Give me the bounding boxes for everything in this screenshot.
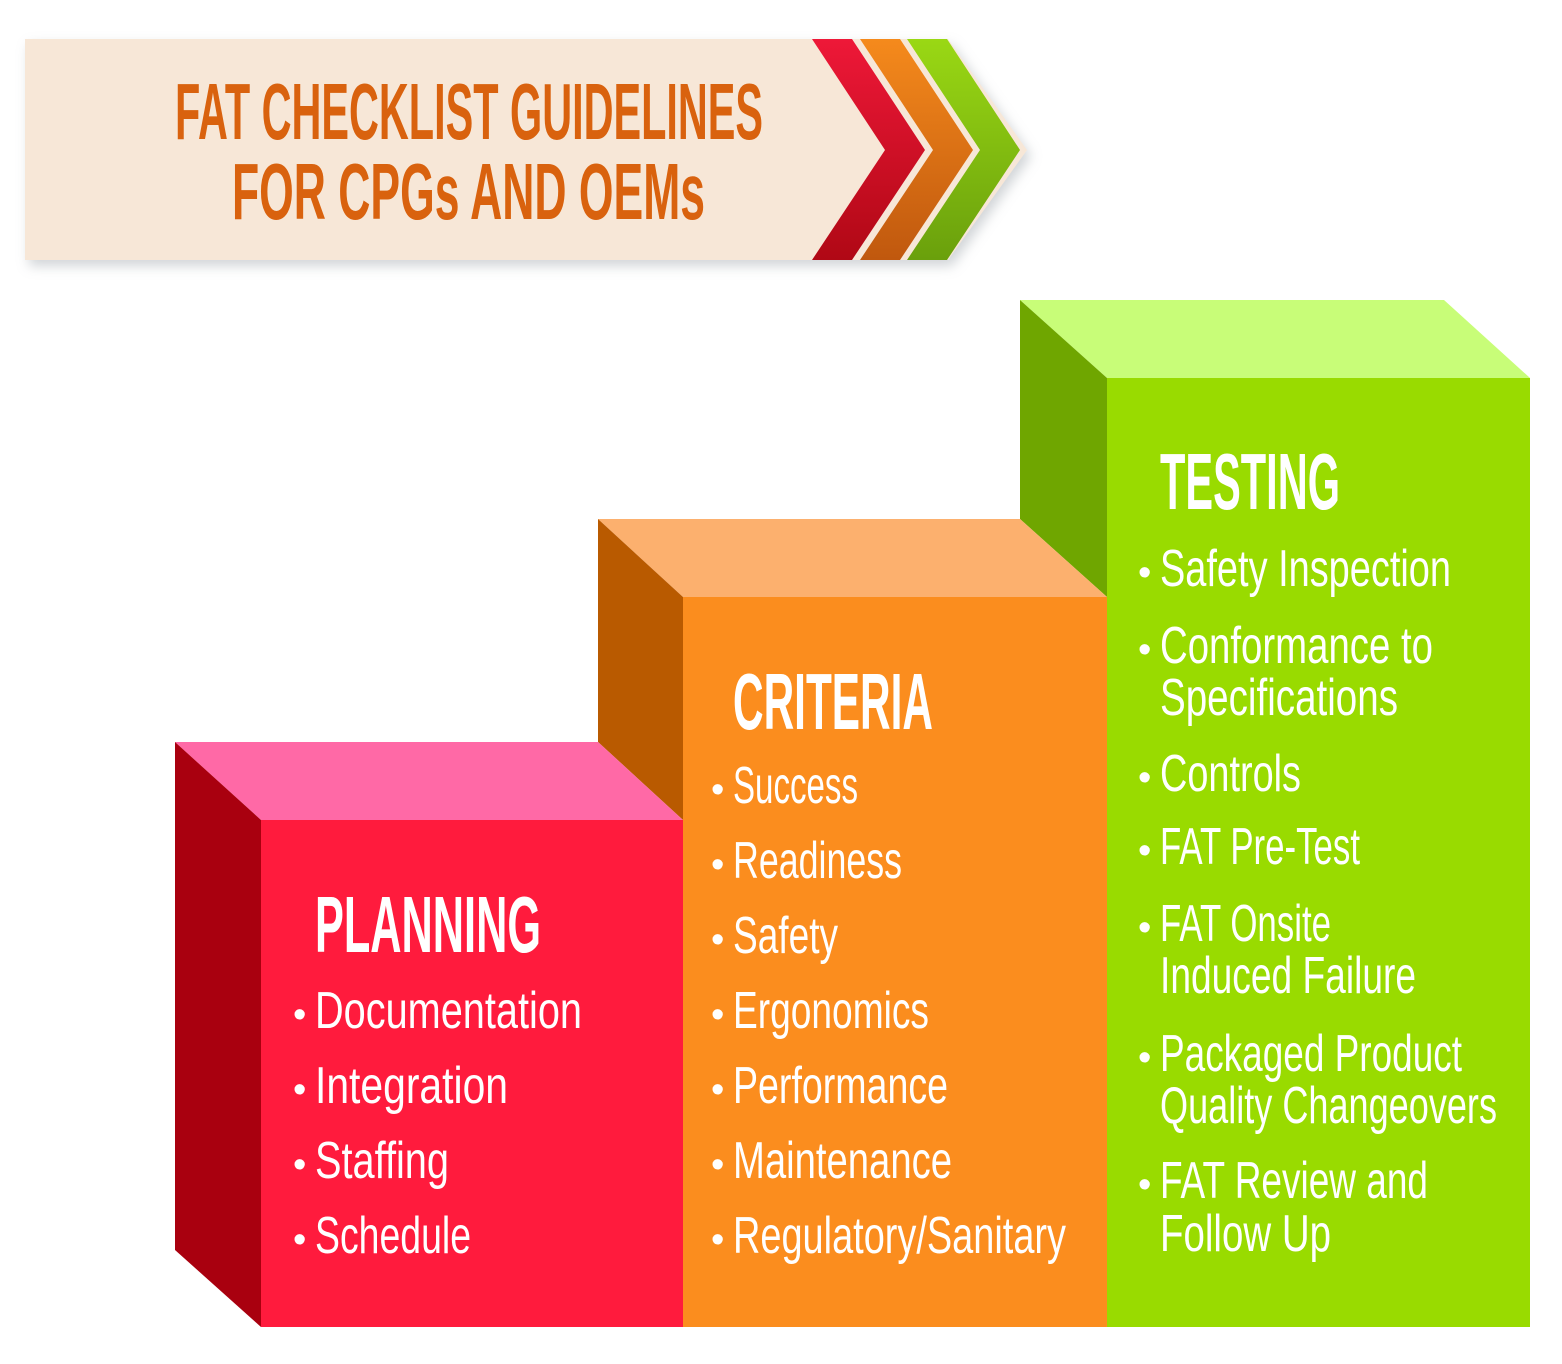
testing text: Controls (1160, 745, 1301, 803)
planning text: • (293, 1219, 306, 1261)
criteria text: Performance (733, 1057, 948, 1115)
criteria text: • (711, 1219, 724, 1261)
testing text: Safety Inspection (1160, 540, 1451, 598)
criteria text: CRITERIA (733, 657, 933, 746)
title text (175, 67, 763, 236)
block: testing (1020, 300, 1530, 1327)
criteria text: Success (733, 757, 858, 815)
title banner (25, 39, 1027, 260)
planning text: • (293, 1069, 306, 1111)
testing text: FAT Review and (1160, 1152, 1428, 1210)
block: criteria (598, 519, 1107, 1327)
testing text: • (1138, 1164, 1151, 1206)
planning text: Documentation (315, 982, 582, 1040)
testing text: • (1138, 629, 1151, 671)
testing text: Follow Up (1160, 1205, 1331, 1263)
planning text: Schedule (315, 1207, 471, 1265)
title text: FOR CPGs AND OEMs (232, 147, 705, 236)
planning text: Integration (315, 1057, 508, 1115)
chevron: orange (860, 39, 973, 260)
testing text: • (1138, 830, 1151, 872)
criteria text: • (711, 919, 724, 961)
planning text: • (293, 1144, 306, 1186)
planning text: PLANNING (315, 880, 541, 969)
criteria text (711, 657, 1066, 1265)
testing text: TESTING (1160, 437, 1340, 526)
criteria text: Safety (733, 907, 838, 965)
testing text: FAT Pre-Test (1160, 818, 1360, 876)
criteria text: • (711, 1144, 724, 1186)
criteria text: • (711, 844, 724, 886)
criteria text: • (711, 1069, 724, 1111)
criteria text: Ergonomics (733, 982, 929, 1040)
criteria text: • (711, 769, 724, 811)
criteria text: Maintenance (733, 1132, 952, 1190)
chevron: red (812, 39, 925, 260)
testing text: • (1138, 552, 1151, 594)
planning text: • (293, 994, 306, 1036)
chevron: green (907, 39, 1020, 260)
planning text: Staffing (315, 1132, 449, 1190)
testing text: • (1138, 757, 1151, 799)
testing text: • (1138, 1037, 1151, 1079)
criteria text: • (711, 994, 724, 1036)
block: planning (175, 742, 683, 1327)
testing text: Induced Failure (1160, 947, 1416, 1005)
testing text: Conformance to (1160, 617, 1433, 675)
criteria text: Regulatory/Sanitary (733, 1207, 1066, 1265)
testing text: FAT Onsite (1160, 895, 1331, 953)
title text: FAT CHECKLIST GUIDELINES (175, 67, 763, 156)
criteria text: Readiness (733, 832, 902, 890)
testing text: • (1138, 907, 1151, 949)
testing text: Specifications (1160, 669, 1398, 727)
planning text (293, 880, 582, 1265)
testing text (1138, 437, 1497, 1263)
